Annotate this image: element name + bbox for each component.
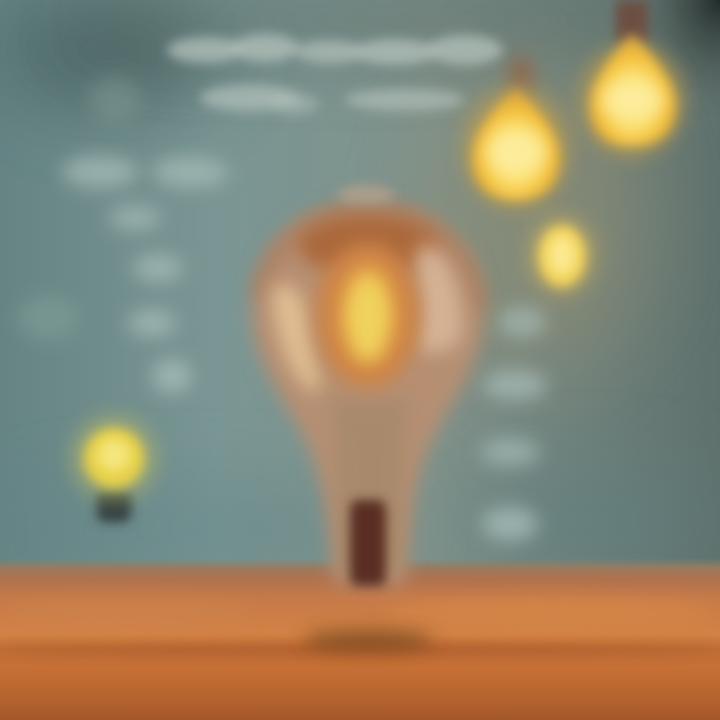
main central light bulb xyxy=(252,185,484,586)
top cap highlight xyxy=(338,185,394,205)
small bulb: lower left xyxy=(70,414,158,522)
right highlight xyxy=(416,245,462,353)
bulb shadow on table xyxy=(302,630,434,650)
title text (illegible, blurred) xyxy=(167,34,503,114)
lower neck tone xyxy=(330,400,410,570)
rim shading xyxy=(258,208,480,310)
upper copper tone xyxy=(298,215,438,275)
dark base xyxy=(350,500,386,586)
hanging bulb: middle xyxy=(462,58,570,210)
left text column (illegible, blurred) xyxy=(18,76,228,393)
table surface xyxy=(0,558,720,720)
left highlight xyxy=(272,284,320,392)
filament glow xyxy=(316,243,420,387)
hanging bulb: top right xyxy=(578,0,686,158)
glass envelope xyxy=(252,204,484,585)
right text column (illegible, blurred) xyxy=(480,307,547,541)
hanging bulb: small xyxy=(526,213,598,297)
